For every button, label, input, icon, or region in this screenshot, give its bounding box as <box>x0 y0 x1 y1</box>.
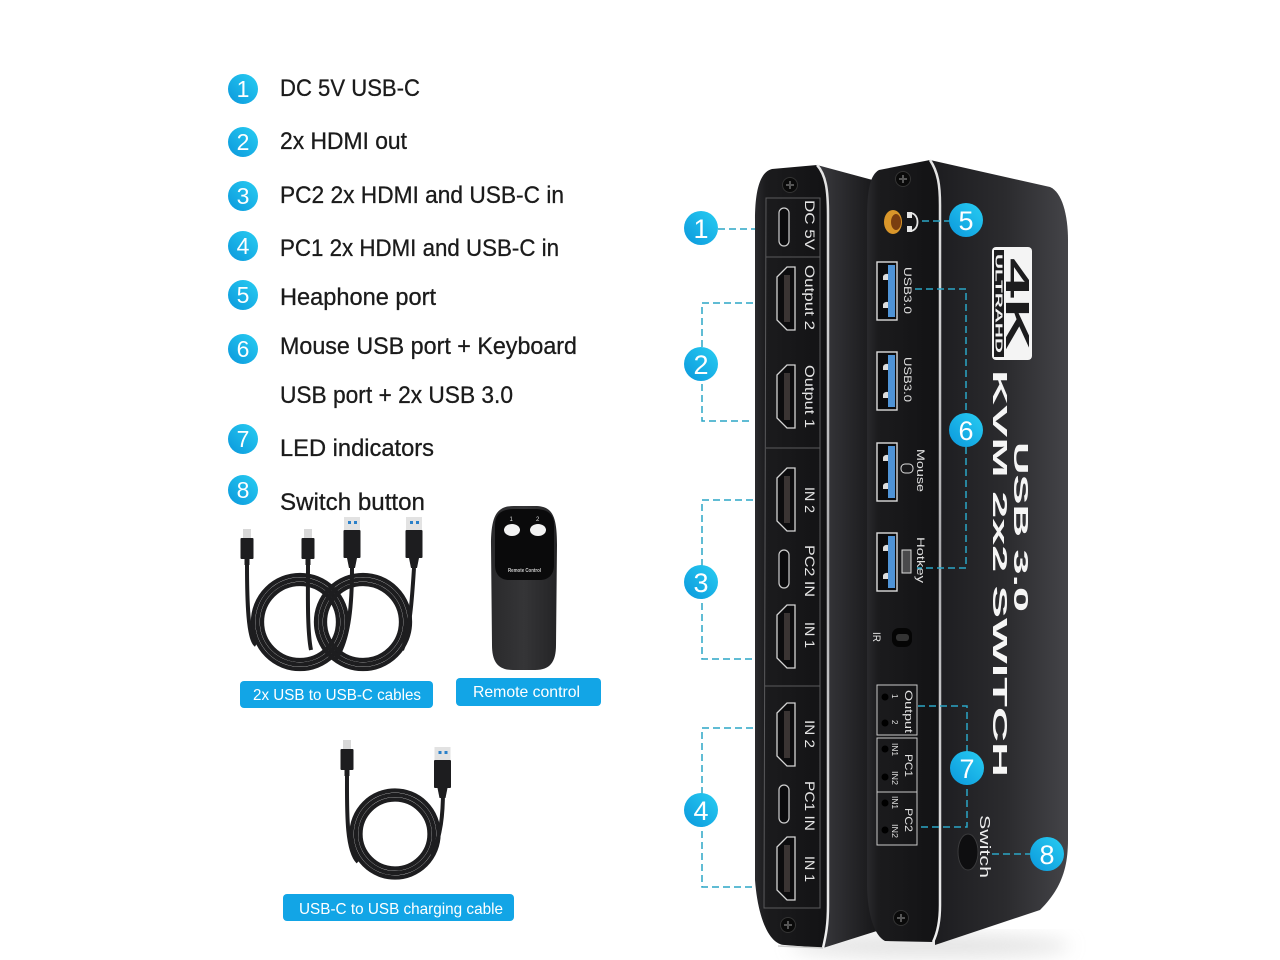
accessory: remote control <box>491 506 557 670</box>
callout 1: 1 <box>693 214 709 244</box>
callout 3 <box>684 500 753 659</box>
label: cables <box>240 681 433 708</box>
list item 2: 2 <box>237 129 249 155</box>
accessory: remote control: 2 <box>536 517 540 523</box>
LED indicators: PC1 <box>902 754 914 777</box>
LED indicators: 2 <box>890 720 899 725</box>
icon: mouse <box>901 464 913 473</box>
list item 3: 3 <box>237 183 249 209</box>
accessory: USB-C to USB charging cable <box>340 740 451 878</box>
list item 8 <box>228 475 425 516</box>
USB labels: USB3.0 <box>901 357 913 402</box>
top side of device <box>930 160 1068 945</box>
callout 1 <box>684 211 755 245</box>
front port labels: IN 2 <box>802 487 817 513</box>
logo: 4K Ultra HD <box>992 247 1036 360</box>
rear face <box>867 160 940 942</box>
callout 2 <box>684 303 753 421</box>
LED indicators: IN1 <box>890 796 899 810</box>
product title: KVM 2x2 SWITCH <box>988 370 1010 777</box>
callout 8: 8 <box>1039 840 1055 870</box>
device side <box>817 165 880 948</box>
list item 2: 2x HDMI out <box>280 128 407 155</box>
accessory: remote control: Remote Control <box>508 568 542 574</box>
USB labels: Hotkey <box>914 537 926 584</box>
icon: keyboard <box>902 550 911 573</box>
callout 6 <box>915 289 983 568</box>
callout 4 <box>684 728 753 887</box>
device: front KVM panel <box>755 165 880 948</box>
switch label: Switch <box>976 815 993 878</box>
front port labels: PC2 IN <box>802 545 817 597</box>
PC1 input ports <box>777 703 795 900</box>
front port labels: DC 5V <box>802 200 817 250</box>
list item 6: USB port + 2x USB 3.0 <box>280 382 513 409</box>
IR sensor: IR <box>870 632 882 642</box>
front port labels: PC1 IN <box>802 781 817 831</box>
label: remote control <box>456 678 601 706</box>
list item 1: 1 <box>237 76 249 102</box>
LED indicators: Output <box>902 690 914 733</box>
LED indicators: PC2 <box>902 808 914 832</box>
logo: 4K Ultra HD: 4K <box>999 258 1036 350</box>
list item 8: 8 <box>237 477 249 503</box>
device: rear KVM panel <box>867 160 1068 945</box>
LED indicators: IN1 <box>890 743 899 757</box>
IR sensor <box>870 628 912 647</box>
USB labels <box>901 267 926 584</box>
product title: USB 3.0 <box>1009 442 1031 612</box>
headphone jack <box>884 210 902 234</box>
product title <box>988 370 1031 777</box>
list item 6: Mouse USB port + Keyboard <box>280 333 577 360</box>
list item 6: 6 <box>237 336 249 362</box>
list item 5 <box>228 280 436 311</box>
list item 1: DC 5V USB-C <box>280 75 420 102</box>
label: cables: 2x USB to USB-C cables <box>253 687 421 704</box>
switch button <box>958 834 978 870</box>
list item 7 <box>228 424 434 462</box>
front port labels: IN 2 <box>802 720 817 748</box>
logo: 4K Ultra HD: ULTRAHD <box>992 254 1004 353</box>
front port labels: Output 1 <box>802 365 817 428</box>
list item 4: 4 <box>237 233 250 259</box>
callout 3: 3 <box>693 568 709 598</box>
LED indicators <box>877 685 917 845</box>
list item 4 <box>228 231 559 262</box>
device shadow <box>790 934 1070 958</box>
LED indicators: IN2 <box>890 771 899 786</box>
list item 7: LED indicators <box>280 435 434 462</box>
accessory: two USB to USB-C cables <box>240 517 422 669</box>
USB labels: Mouse <box>914 449 926 492</box>
label: charging cable <box>283 894 514 921</box>
callout 5 <box>922 203 983 237</box>
front port labels: Output 2 <box>802 265 817 330</box>
accessory: remote control: 1 <box>510 517 514 523</box>
feature list <box>228 74 577 516</box>
list item 7: 7 <box>237 426 249 452</box>
list item 1 <box>228 74 420 104</box>
callout 6: 6 <box>958 416 974 446</box>
list item 8: Switch button <box>280 489 425 516</box>
list item 3: PC2 2x HDMI and USB-C in <box>280 182 564 209</box>
list item 4: PC1 2x HDMI and USB-C in <box>280 235 559 262</box>
callout 4: 4 <box>693 796 709 826</box>
USB labels: USB3.0 <box>901 267 913 314</box>
list item 2 <box>228 127 407 157</box>
label: remote control: Remote control <box>473 684 580 701</box>
front port labels <box>802 200 817 882</box>
PC2 input ports <box>777 468 795 668</box>
list item 5: 5 <box>237 282 249 308</box>
HDMI output ports <box>777 267 795 428</box>
icon: headphones <box>907 212 918 232</box>
list item 5: Heaphone port <box>280 284 436 311</box>
list item 6 <box>228 333 577 409</box>
LED indicators: IN2 <box>890 824 899 839</box>
callout 8 <box>992 837 1064 871</box>
label: charging cable: USB-C to USB charging cable <box>299 901 503 918</box>
callout 7 <box>918 706 984 827</box>
callout 7: 7 <box>959 754 975 784</box>
front port labels: IN 1 <box>802 856 817 882</box>
LED indicators: 1 <box>890 694 899 699</box>
front face <box>755 165 828 948</box>
callout 2: 2 <box>693 350 709 380</box>
USB ports <box>877 262 897 591</box>
front port labels: IN 1 <box>802 622 817 648</box>
USB-C power port <box>779 208 789 246</box>
callout 5: 5 <box>958 206 974 236</box>
